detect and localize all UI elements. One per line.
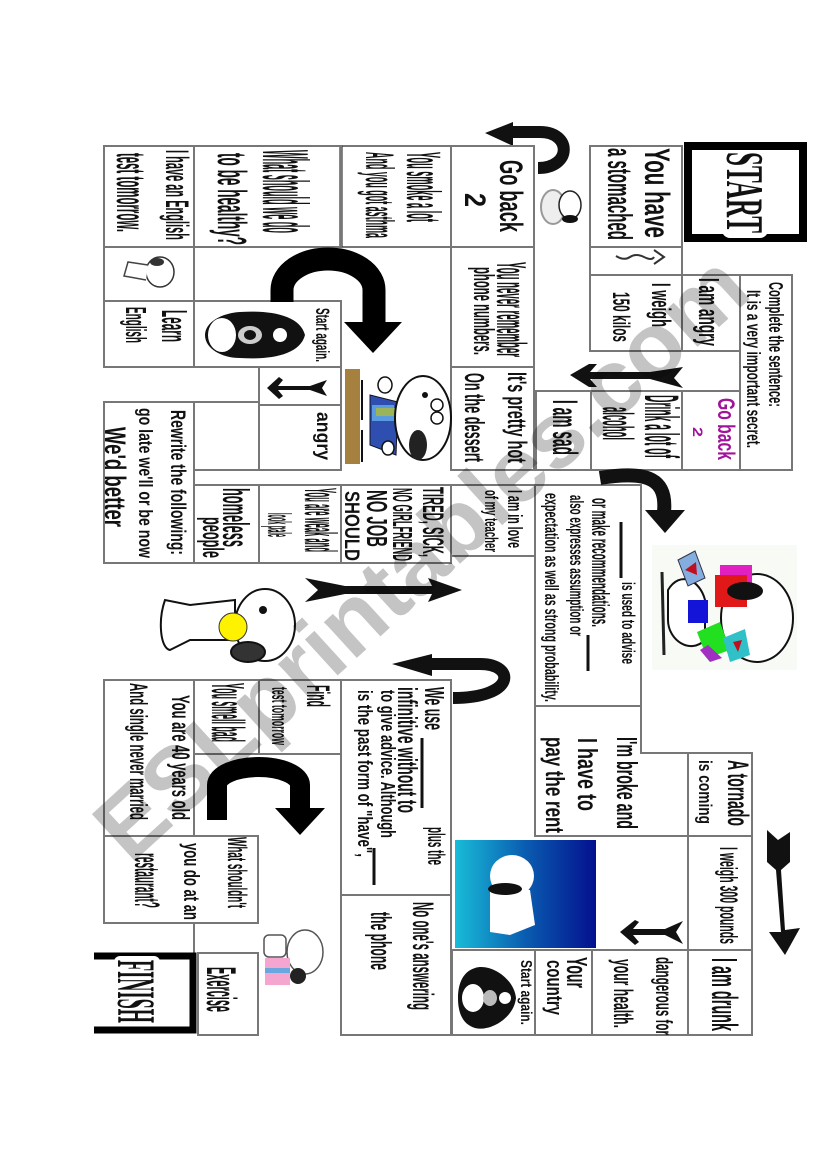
cell: Drink a lot of alcohol	[591, 391, 687, 470]
icon: snoopy hugging woodstock	[161, 589, 295, 662]
icon: blue snoopy image	[455, 840, 596, 948]
cell: small arrow	[259, 367, 341, 405]
cell: broke	[535, 706, 688, 836]
cell: tornado	[688, 753, 754, 836]
cell: your country	[535, 950, 592, 1035]
cell: You have a stomached	[590, 146, 682, 247]
text: homeless	[215, 488, 256, 547]
cell: rewrite the following: go late we'll or be now	[134, 408, 155, 558]
cell: You never remember phone numbers	[451, 247, 535, 367]
cell: You smoke a lot	[341, 146, 451, 247]
cell: find test: Find	[300, 685, 336, 707]
cell: rewrite the following: Rewrite the following:	[166, 410, 189, 555]
arrow: curved above We use	[392, 654, 504, 698]
connector line	[193, 923, 195, 953]
cell: I am angry	[682, 275, 740, 351]
text: phone numbers.	[467, 267, 499, 355]
text: You are weak and	[295, 488, 346, 552]
cell: English test	[104, 146, 195, 247]
finish box	[94, 956, 193, 1030]
cell: What should we do	[194, 146, 341, 247]
cell: We use: is the past form of "have",	[353, 690, 375, 857]
text: You never remember	[488, 262, 535, 357]
icon: snoopy with love letters	[652, 545, 797, 670]
cell: is used to advise: also expresses assumption or	[565, 495, 586, 636]
cell: exercise	[198, 953, 258, 1035]
cell: Go back 2: Go back	[493, 160, 529, 232]
cell: empty space	[193, 247, 195, 301]
arrow: far right	[767, 830, 800, 955]
arrow: lower u-turn	[217, 767, 325, 835]
text: I have an English	[159, 150, 195, 240]
cell: broke: I'm broke and	[610, 737, 642, 829]
cell: broke: I have to	[572, 738, 603, 811]
text: You smell bad	[202, 683, 254, 742]
cell: We use: We use	[419, 687, 450, 730]
cell: in love with teacher: I am in love	[503, 490, 525, 548]
cell: you are 40	[104, 680, 194, 836]
text: test tomorrow	[267, 687, 292, 745]
cell: Go back 2: 2	[458, 193, 491, 207]
text: I am drunk	[704, 958, 745, 1031]
cell: your country: country	[542, 960, 567, 1016]
cell: what shouldn't you do: you do at an	[179, 843, 204, 920]
cell: complete the sentence: Complete the sentence:	[764, 282, 786, 407]
icon: snoopy with pen	[345, 369, 451, 464]
text: What shouldn't	[222, 837, 252, 908]
cell: start again pirate	[194, 301, 341, 367]
cell: start again pirate: Start again.	[311, 308, 332, 362]
text: to be healthy?	[209, 153, 255, 245]
arrow: curved top	[485, 122, 564, 168]
cell: We use	[341, 680, 451, 895]
cell: start again pirate 2: Start again.	[517, 960, 534, 1025]
text: What should we do	[249, 150, 322, 233]
cell: no one's answering: the phone	[364, 912, 396, 970]
cell: Go back 2	[451, 146, 534, 247]
cell: find test	[259, 680, 341, 754]
cell: is used to advise: expectation as well as strong probability.	[540, 493, 561, 702]
cell: angry	[259, 405, 341, 470]
cell: you are 40: You are 40 years old	[166, 695, 194, 820]
cell: purple go back 2: 2	[690, 427, 706, 437]
cell: tired sick: SHOULD	[340, 491, 363, 561]
cell: complete the sentence: It is a very important secret.	[742, 290, 763, 448]
cell: in love with teacher: of my teacher	[481, 490, 501, 552]
cell: weigh 300 pounds	[688, 836, 752, 950]
cell: I weigh 150 kilos: I weigh	[646, 283, 676, 327]
cell: You have a stomached: You have	[637, 148, 676, 238]
connector lines	[641, 706, 688, 753]
cell: Learn English: Learn	[154, 310, 195, 342]
cell: is used to advise: or make recommendations.	[586, 498, 614, 627]
text: On the dessert	[459, 373, 490, 462]
arrow: big u-turn	[282, 259, 402, 353]
arrow: long horizontal	[305, 578, 462, 602]
cell: small snoopy	[104, 247, 194, 301]
cell: You are weak	[259, 485, 346, 563]
cell: I weigh 150 kilos: 150 kilos	[607, 292, 634, 342]
cell: I am sad	[536, 391, 591, 470]
cell: Learn English: English	[119, 307, 151, 343]
cell: empty square	[194, 402, 259, 470]
text: alcohol	[593, 407, 642, 440]
cell: purple go back 2: Go back	[712, 398, 739, 460]
cell: purple go back 2	[682, 391, 740, 470]
text: I weigh 300 pounds	[714, 847, 742, 944]
cell: drunk	[688, 950, 752, 1035]
text: a stomached	[600, 148, 638, 240]
arrow: left pointing by I am angry	[570, 364, 683, 388]
text: TIRED, SICK,	[416, 487, 449, 557]
text: restaurant?	[127, 853, 166, 908]
cell: I am angry: I am angry	[692, 278, 724, 346]
cell: complete the sentence	[740, 275, 792, 470]
text: FINISH	[106, 960, 166, 1023]
start box	[688, 146, 803, 238]
cell: Learn English	[104, 301, 195, 367]
cell: you smell bad	[194, 680, 259, 754]
cell: what shouldn't you do	[104, 836, 258, 923]
cell: homeless people	[194, 485, 259, 563]
cell: in love with teacher	[451, 485, 535, 556]
cell: you are 40: And single never married	[124, 683, 152, 820]
text: test tomorrow.	[108, 153, 154, 232]
cell: rewrite the following	[98, 402, 194, 563]
icon: small snoopy top	[541, 190, 581, 224]
cell: is used to advise	[535, 485, 641, 706]
text: people	[196, 517, 229, 558]
text: Drink a lot of	[634, 395, 687, 458]
cell: no one's answering	[341, 895, 451, 1035]
cell: tornado: A tornado	[721, 760, 754, 826]
cell: your country: Your	[560, 957, 592, 988]
cell: rewrite the following: We'd better	[98, 427, 131, 527]
cell: tornado: is coming	[695, 760, 715, 824]
text: your health.	[608, 959, 638, 1028]
text: You smoke a lot	[396, 152, 449, 222]
text: NO GIRLFRIEND	[387, 488, 418, 561]
icon: snoopy with pink gift	[264, 930, 323, 985]
cell: We use: plus the	[422, 827, 449, 865]
cell: We use: to give advice. Although	[376, 690, 398, 838]
start box: START	[715, 152, 773, 233]
cell: pretty hot on the dessert	[451, 367, 534, 470]
text: And you got asthma	[357, 152, 401, 238]
cell: broke: pay the rent	[540, 737, 570, 833]
arrow: small beside blue image	[620, 920, 683, 945]
cell: pretty hot on the dessert: It's pretty hot	[502, 372, 532, 463]
cell: start again pirate 2	[452, 950, 535, 1035]
cell: squiggle arrow	[590, 247, 682, 275]
text: Exercise	[198, 967, 245, 1012]
watermark: ESLprintables.com	[75, 235, 767, 880]
cell: dangerous for your health	[592, 950, 688, 1035]
cell: dangerous for your health: dangerous for	[651, 957, 677, 1035]
cell: tired sick: NO JOB	[360, 490, 392, 547]
cell: angry: angry	[312, 412, 333, 460]
arrow: curved into love snoopy	[600, 475, 685, 533]
cell: I weigh 150 kilos	[590, 275, 682, 351]
cell: tired sick	[340, 485, 451, 563]
cell: We use: infinitive without to	[392, 687, 423, 813]
text: I am sad	[545, 400, 584, 455]
cell: is used to advise: is used to advise	[618, 582, 638, 664]
text: look pale	[261, 513, 298, 537]
